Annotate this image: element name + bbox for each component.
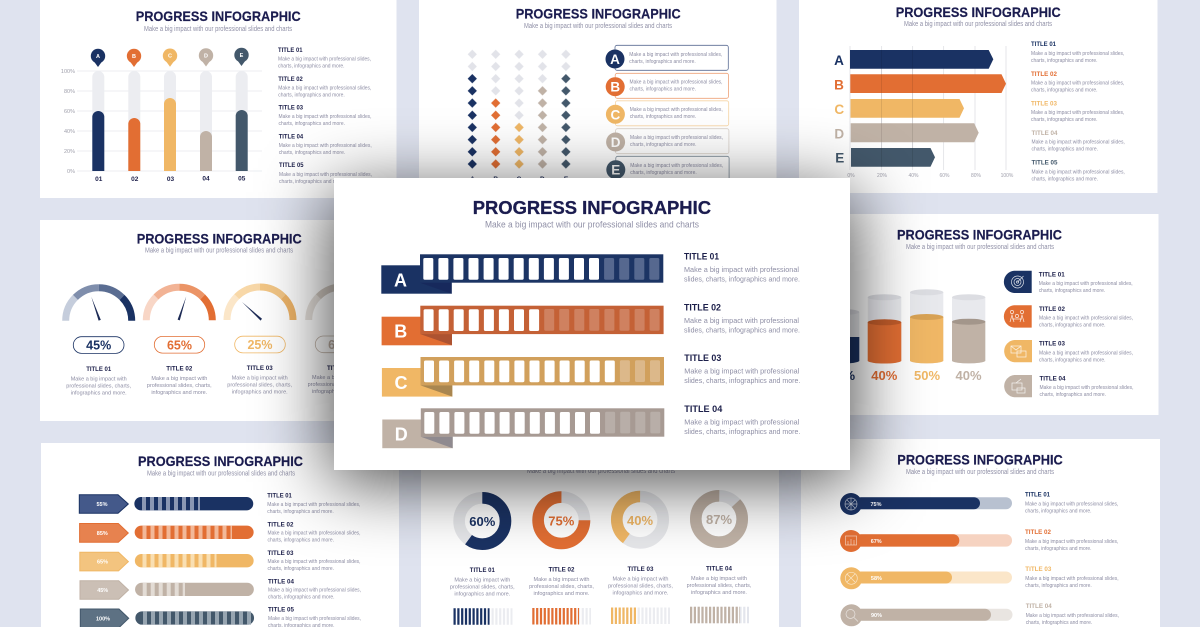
main subtitle: Make a big impact with our professional slides and charts	[485, 220, 699, 230]
text list: pill bar titles: Make a big impact with professional slides,	[1025, 502, 1119, 508]
ribbon bar C: C	[394, 373, 408, 393]
arrow percent tags	[79, 495, 129, 627]
horizontal arrow bar chart: A	[834, 53, 844, 68]
text list: arrow bar titles: TITLE 03	[1031, 100, 1057, 108]
donut 40 percent	[608, 487, 672, 552]
text list: pill bar titles: charts, infographics and more.	[1025, 583, 1092, 589]
text block: title 04	[684, 404, 800, 436]
gauge captions: infographics and more.	[151, 390, 208, 396]
panel: diamond grid slide (top centre)	[419, 0, 776, 185]
text list: column chart titles: TITLE 04	[279, 133, 304, 140]
text list: pill bar titles: TITLE 01	[1025, 492, 1050, 499]
text list: striped bar titles: charts, infographics and more.	[268, 594, 335, 600]
text list: pill bar titles: TITLE 02	[1025, 529, 1051, 536]
text list: cylinder titles: TITLE 04	[1040, 376, 1066, 382]
text list: striped bar titles: TITLE 03	[268, 550, 294, 557]
callout list: lettered boxes: charts, infographics and more.	[630, 114, 697, 120]
gauge captions: Make a big impact with	[151, 376, 207, 382]
text list: column chart titles: TITLE 01	[278, 47, 303, 54]
text list: arrow bar titles: Make a big impact with professional slides,	[1031, 80, 1125, 86]
text list: column chart titles: charts, infographics and more.	[279, 150, 346, 156]
callout list: lettered boxes: Make a big impact with professional slides,	[630, 107, 723, 113]
gauge captions: TITLE 01	[86, 366, 112, 373]
callout list: lettered boxes	[606, 45, 729, 181]
text list: striped bar titles: TITLE 02	[268, 521, 294, 528]
callout list: lettered boxes: charts, infographics and more.	[629, 59, 696, 65]
panel: cylinder slide (middle right)	[800, 214, 1158, 415]
text list: striped bar titles	[267, 493, 361, 627]
value pills: 65%	[328, 338, 353, 352]
panel: column chart slide (top left)	[40, 0, 396, 198]
cylinder chart: 50%	[914, 368, 940, 383]
text block: title 04: TITLE 04	[684, 404, 723, 415]
callout list: lettered boxes: Make a big impact with professional slides,	[629, 52, 723, 58]
text list: striped bar titles: Make a big impact with professional slides,	[268, 588, 361, 594]
text list: column chart titles: Make a big impact with professional slides,	[279, 172, 372, 178]
callout list: lettered boxes: charts, infographics and more.	[630, 170, 697, 176]
cylinder chart	[826, 289, 985, 383]
column chart with pins: 20%	[64, 149, 75, 155]
text list: cylinder titles: Make a big impact with professional slides,	[1039, 316, 1133, 322]
callout list: lettered boxes: Make a big impact with professional slides,	[630, 135, 723, 141]
text list: column chart titles: Make a big impact with professional slides,	[278, 114, 372, 120]
donut captions: Make a big impact with	[691, 576, 747, 582]
column chart with pins: 02	[131, 176, 139, 183]
gauge captions: professional slides, charts,	[66, 384, 132, 390]
horizontal arrow bar chart: 100%	[1001, 173, 1014, 179]
text list: arrow bar titles: TITLE 01	[1031, 41, 1056, 48]
text list: arrow bar titles: charts, infographics and more.	[1031, 58, 1098, 64]
cylinder chart: 30%	[829, 368, 855, 383]
gauge captions: infographics and more.	[232, 390, 288, 396]
stripe meters	[454, 615, 749, 616]
arrow percent tags: 45%	[97, 588, 108, 594]
text block: title 01	[684, 252, 800, 284]
striped progress bars	[141, 504, 253, 618]
text list: striped bar titles: TITLE 01	[267, 493, 292, 500]
donut 60 percent	[459, 498, 506, 544]
ribbon bar B	[382, 306, 664, 345]
horizontal arrow bar chart: 40%	[908, 173, 919, 179]
text list: striped bar titles: charts, infographics and more.	[268, 566, 334, 572]
horizontal pill bars: 75%	[870, 502, 882, 508]
text list: striped bar titles: Make a big impact with professional slides,	[268, 616, 361, 622]
text list: arrow bar titles	[1031, 41, 1125, 182]
text block: title 01: slides, charts, infographics and more.	[684, 274, 800, 284]
gauge 1	[66, 288, 132, 321]
text block: title 03	[684, 353, 800, 385]
donut captions: professional slides, charts,	[687, 583, 752, 589]
donut captions: infographics and more.	[613, 591, 669, 597]
text list: striped bar titles: TITLE 04	[268, 578, 294, 585]
gauge captions	[66, 365, 373, 396]
text block: title 02: slides, charts, infographics and more.	[684, 326, 800, 334]
text list: pill bar titles: charts, infographics and more.	[1026, 620, 1093, 626]
subtitle: Make a big impact with our professional slides and charts	[904, 21, 1052, 28]
heading: gauge slide: PROGRESS INFOGRAPHIC	[137, 230, 302, 246]
text list: cylinder titles: charts, infographics and more.	[1039, 358, 1106, 364]
text list: column chart titles: TITLE 02	[278, 76, 303, 83]
subtitle: Make a big impact with our professional slides and charts	[906, 469, 1054, 476]
horizontal arrow bar chart: D	[834, 126, 844, 142]
donut 40 percent: 40%	[627, 513, 653, 528]
value pills: 65%	[167, 338, 192, 352]
heading: pill bar slide: PROGRESS INFOGRAPHIC	[897, 452, 1063, 468]
text list: cylinder titles: TITLE 02	[1039, 306, 1065, 313]
callout list: lettered boxes: Make a big impact with professional slides,	[630, 163, 724, 169]
ribbon bar A: A	[394, 270, 407, 290]
cylinder chart: 40%	[955, 368, 982, 383]
horizontal arrow bar chart: 80%	[971, 173, 982, 179]
horizontal pill bars: 58%	[871, 576, 882, 582]
text block: title 03: slides, charts, infographics and more.	[684, 376, 800, 385]
gauge captions: Make a big impact with	[312, 375, 368, 381]
ribbon bar B: B	[394, 322, 407, 342]
callout list: lettered boxes: Make a big impact with professional slides,	[630, 80, 723, 86]
text list: striped bar titles: charts, infographics and more.	[267, 509, 334, 515]
column chart with pins: C	[168, 54, 172, 60]
column chart with pins: B	[132, 54, 136, 60]
column chart with pins: 04	[202, 176, 210, 183]
column chart with pins: 60%	[64, 109, 75, 115]
ribbon bar D	[382, 408, 664, 448]
text list: pill bar titles: TITLE 04	[1026, 603, 1052, 610]
subtitle: Make a big impact with our professional slides and charts	[527, 468, 675, 475]
text list: column chart titles: Make a big impact with professional slides,	[278, 56, 371, 62]
donut captions: TITLE 04	[706, 566, 732, 573]
subtitle: Make a big impact with our professional slides and charts	[524, 23, 672, 30]
text list: cylinder titles: Make a big impact with professional slides,	[1040, 385, 1134, 391]
horizontal pill bars	[840, 493, 1012, 626]
text list: cylinder titles: Make a big impact with professional slides,	[1039, 281, 1133, 287]
column chart with pins: E	[240, 53, 244, 59]
text list: striped bar titles: Make a big impact with professional slides,	[268, 559, 361, 565]
heading: diamond grid slide: PROGRESS INFOGRAPHIC	[516, 6, 681, 22]
gauge captions: professional slides, charts,	[147, 383, 212, 389]
diamond progress grid: D	[540, 176, 545, 183]
text list: column chart titles: charts, infographics and more.	[278, 64, 345, 70]
horizontal arrow bar chart: B	[834, 78, 844, 92]
heading: column chart slide: PROGRESS INFOGRAPHIC	[136, 8, 301, 24]
column chart with pins: 03	[167, 176, 174, 183]
diamond progress grid	[461, 48, 578, 183]
text block: title 04: Make a big impact with professional	[684, 418, 800, 426]
ribbon bar C	[382, 357, 664, 397]
text list: column chart titles: charts, infographics and more.	[279, 179, 346, 185]
text list: cylinder titles: TITLE 03	[1039, 341, 1065, 348]
subtitle: Make a big impact with our professional slides and charts	[147, 470, 295, 478]
gauge captions: infographics and more.	[71, 390, 127, 396]
donut captions: Make a big impact with	[613, 577, 668, 583]
column chart with pins: 0%	[67, 169, 75, 175]
text list: cylinder titles: TITLE 01	[1039, 272, 1065, 278]
text list: column chart titles: Make a big impact with professional slides,	[278, 86, 372, 92]
text list: cylinder titles: charts, infographics and more.	[1039, 323, 1106, 329]
text list: cylinder titles	[1039, 272, 1134, 398]
diamond progress grid: B	[493, 176, 498, 183]
callout list: lettered boxes: B	[610, 80, 620, 95]
column chart with pins: 05	[238, 176, 246, 182]
donut captions: Make a big impact with	[454, 578, 510, 584]
text list: pill bar titles: Make a big impact with professional slides,	[1025, 576, 1119, 582]
ribbon bar D: D	[395, 424, 408, 444]
text block: title 02	[684, 302, 800, 334]
text block: title 01: Make a big impact with professional	[684, 265, 799, 274]
text block: title 01: TITLE 01	[684, 252, 720, 262]
horizontal arrow bar chart: 60%	[939, 173, 950, 179]
donut captions: TITLE 03	[628, 566, 654, 573]
text list: arrow bar titles: TITLE 05	[1032, 160, 1058, 166]
subtitle: Make a big impact with our professional slides and charts	[145, 248, 293, 254]
text list: column chart titles: charts, infographics and more.	[278, 121, 345, 127]
callout list: lettered boxes: D	[611, 135, 621, 150]
ribbon bar A	[381, 254, 663, 294]
subtitle: Make a big impact with our professional slides and charts	[144, 26, 292, 33]
gauge 4	[309, 287, 342, 320]
donut captions: professional slides, charts,	[529, 584, 594, 590]
gauge captions: TITLE 03	[247, 365, 273, 372]
donut 75 percent: 75%	[548, 514, 575, 528]
donut captions	[450, 566, 752, 598]
horizontal pill bars: 67%	[871, 539, 882, 545]
text list: arrow bar titles: charts, infographics and more.	[1031, 88, 1098, 94]
column chart with pins: 01	[95, 176, 103, 183]
gauge captions: Make a big impact with	[232, 376, 288, 382]
donut captions: infographics and more.	[691, 590, 747, 596]
value pills	[73, 336, 366, 353]
text list: column chart titles: Make a big impact with professional slides,	[279, 143, 372, 149]
arrow percent tags: 55%	[96, 502, 108, 508]
subtitle: Make a big impact with our professional slides and charts	[906, 244, 1054, 251]
horizontal arrow bar chart: 20%	[877, 173, 888, 179]
text list: striped bar titles: Make a big impact with professional slides,	[268, 530, 361, 536]
text list: arrow bar titles: Make a big impact with professional slides,	[1031, 51, 1125, 57]
horizontal arrow bar chart: E	[835, 150, 844, 166]
panel: pill bar slide (bottom right)	[801, 439, 1160, 627]
gauge captions: professional slides, charts,	[227, 382, 293, 388]
gauge captions: TITLE 02	[166, 366, 193, 373]
text list: arrow bar titles: Make a big impact with professional slides,	[1032, 170, 1125, 176]
callout list: lettered boxes: charts, infographics and more.	[630, 86, 696, 92]
donut captions: TITLE 01	[470, 567, 495, 574]
donut captions: professional slides, charts,	[450, 585, 515, 591]
text list: column chart titles: TITLE 03	[278, 104, 303, 112]
text list: pill bar titles: TITLE 03	[1025, 566, 1052, 573]
text list: arrow bar titles: TITLE 02	[1031, 71, 1057, 78]
callout list: lettered boxes: A	[610, 52, 620, 67]
heading: striped bar slide: PROGRESS INFOGRAPHIC	[138, 453, 303, 469]
arrow percent tags: 65%	[97, 560, 108, 566]
horizontal arrow bar chart	[834, 46, 1014, 179]
value pills: 25%	[247, 338, 273, 352]
panel: centre slide with ribbon bars	[334, 178, 850, 470]
text list: pill bar titles: Make a big impact with professional slides,	[1025, 539, 1119, 545]
heading: main title: PROGRESS INFOGRAPHIC	[473, 197, 711, 218]
gauge 2	[146, 287, 212, 320]
text list: cylinder titles: charts, infographics and more.	[1040, 392, 1106, 398]
text list: arrow bar titles: Make a big impact with professional slides,	[1032, 140, 1125, 146]
heading: arrow bar slide: PROGRESS INFOGRAPHIC	[896, 4, 1061, 20]
column chart with pins: 40%	[64, 129, 75, 135]
arrow percent tags: 85%	[97, 531, 108, 537]
horizontal arrow bar chart: C	[834, 102, 844, 117]
donut captions: infographics and more.	[534, 591, 590, 597]
donut 87 percent: 87%	[706, 512, 732, 527]
text block: title 02: TITLE 02	[684, 302, 721, 314]
donut captions: professional slides, charts,	[608, 584, 673, 590]
text list: arrow bar titles: charts, infographics and more.	[1031, 117, 1098, 123]
text block: title 04: slides, charts, infographics and more.	[684, 427, 800, 436]
text list: pill bar titles	[1025, 492, 1119, 626]
text list: striped bar titles: TITLE 05	[268, 607, 294, 614]
cylinder chart: 40%	[871, 368, 898, 383]
column chart with pins: 100%	[61, 69, 75, 75]
text list: pill bar titles: charts, infographics and more.	[1025, 508, 1092, 514]
text list: pill bar titles: charts, infographics and more.	[1025, 546, 1092, 552]
callout list: lettered boxes: charts, infographics and more.	[630, 142, 697, 148]
text list: arrow bar titles: TITLE 04	[1032, 130, 1058, 137]
diamond progress grid: C	[517, 176, 522, 183]
text block: title 03: TITLE 03	[684, 353, 721, 364]
gauge captions: Make a big impact with	[71, 376, 127, 382]
diamond progress grid: A	[470, 176, 475, 183]
text list: striped bar titles: Make a big impact with professional slides,	[267, 502, 361, 508]
donut 60 percent: 60%	[469, 514, 496, 529]
text list: arrow bar titles: Make a big impact with professional slides,	[1031, 110, 1125, 116]
donut captions: TITLE 02	[548, 567, 575, 574]
text list: arrow bar titles: charts, infographics and more.	[1032, 176, 1098, 182]
horizontal arrow bar chart: 0%	[847, 173, 855, 179]
text block: title 03: Make a big impact with professional	[684, 367, 800, 376]
text list: column chart titles: charts, infographics and more.	[278, 92, 345, 98]
column chart with pins: D	[204, 54, 208, 60]
text block: title 02: Make a big impact with professional	[684, 316, 799, 325]
panel: striped bar slide (bottom left)	[41, 443, 399, 627]
value pills: 45%	[86, 339, 111, 353]
gauge captions: professional slides, charts,	[308, 382, 373, 388]
column chart with pins: A	[96, 54, 100, 60]
callout list: lettered boxes: E	[611, 163, 620, 178]
arrow percent tags: 100%	[96, 616, 110, 622]
column chart with pins: 80%	[64, 89, 75, 95]
diamond progress grid: E	[564, 176, 569, 183]
donut 87 percent	[686, 486, 752, 552]
panel: gauge slide (middle left)	[40, 220, 380, 421]
soft shadow behind centre slide	[330, 192, 854, 482]
callout list: lettered boxes: C	[611, 107, 621, 122]
gauge captions: TITLE 04	[327, 365, 353, 372]
text list: arrow bar titles: charts, infographics and more.	[1032, 146, 1098, 152]
text list: column chart titles	[278, 47, 372, 185]
heading: cylinder slide: PROGRESS INFOGRAPHIC	[897, 226, 1062, 242]
text list: striped bar titles: charts, infographics and more.	[268, 538, 334, 544]
horizontal pill bars: 90%	[871, 613, 882, 619]
icon tabs	[1004, 271, 1032, 397]
donut 75 percent	[538, 497, 584, 544]
column chart with pins	[61, 48, 262, 183]
donut captions: infographics and more.	[454, 592, 511, 598]
text list: pill bar titles: Make a big impact with professional slides,	[1026, 613, 1119, 619]
text list: column chart titles: TITLE 05	[279, 162, 304, 169]
gauge captions: infographics and more.	[312, 389, 368, 395]
gauge 3	[227, 287, 293, 321]
donut captions: Make a big impact with	[534, 577, 589, 583]
text list: cylinder titles: Make a big impact with professional slides,	[1039, 350, 1133, 356]
text list: cylinder titles: charts, infographics and more.	[1039, 288, 1106, 294]
panel: donut slide (bottom centre)	[421, 440, 779, 627]
panel: arrow bar chart slide (top right)	[799, 0, 1158, 193]
